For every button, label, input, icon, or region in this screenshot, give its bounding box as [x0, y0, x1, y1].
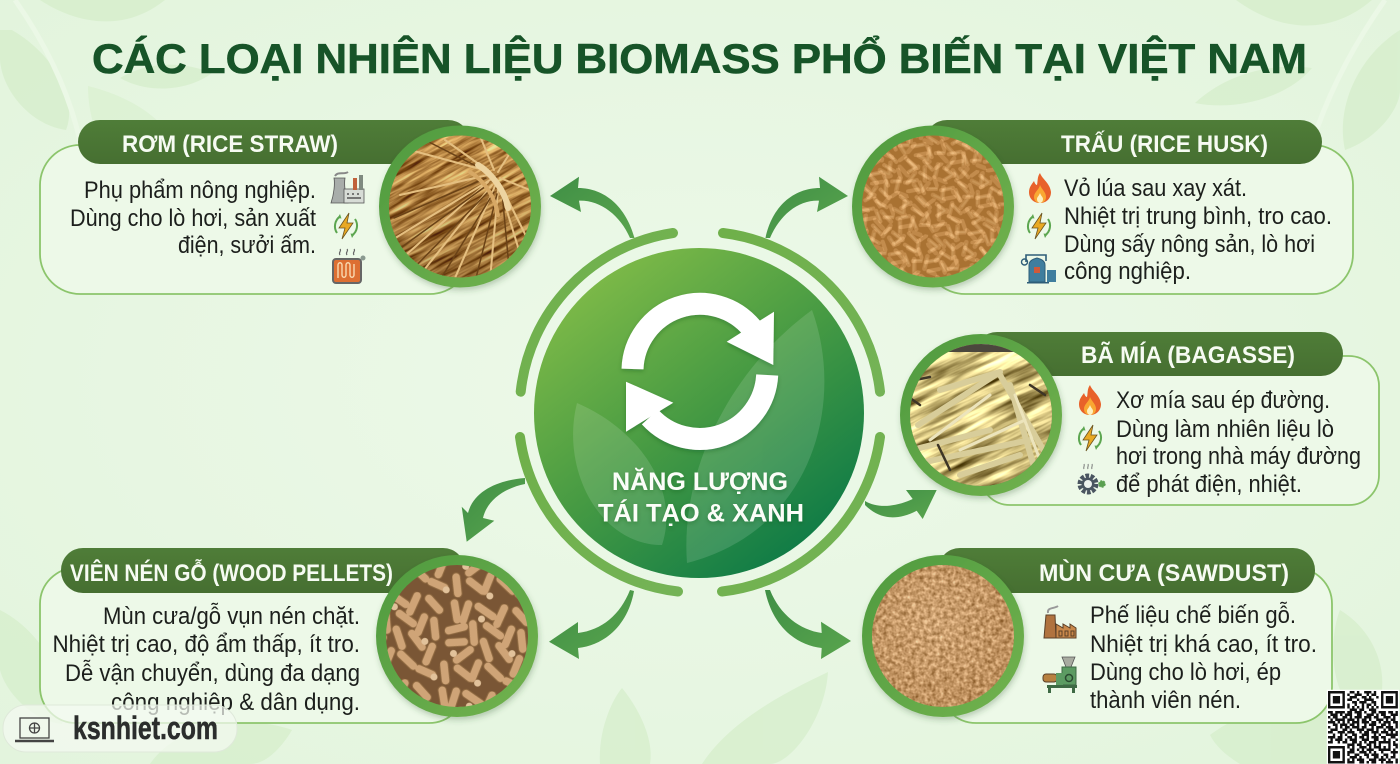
arrow: to bagasse — [865, 490, 937, 519]
heading: bagasse: BÃ MÍA (BAGASSE) — [1081, 341, 1295, 369]
icon: flame — [1029, 173, 1051, 203]
icon: laptop — [15, 718, 54, 741]
text: rice husk description: công nghiệp. — [1064, 258, 1191, 285]
center ring arcs — [520, 233, 880, 592]
hub label: NĂNG LƯỢNG — [612, 467, 788, 496]
text: bagasse description: hơi trong nhà máy đường — [1116, 443, 1361, 470]
icon: gears — [1080, 464, 1105, 492]
text: rice straw description — [70, 177, 316, 259]
arrow: to rice straw — [550, 177, 634, 238]
arrow: to wood pellets upper — [462, 478, 525, 542]
icon: heater — [333, 249, 366, 283]
panel box: wood pellets — [40, 568, 465, 723]
icon: flame — [1079, 385, 1101, 415]
text: wood pellets description — [52, 603, 360, 716]
icon: energy bolt — [335, 213, 357, 239]
photo: bagasse — [898, 334, 1066, 502]
text: wood pellets description: Nhiệt trị cao, độ ẩm thấp, ít tro. — [52, 631, 360, 658]
arrow: to sawdust — [765, 590, 851, 659]
heading: wood pellets — [61, 548, 465, 593]
heading: sawdust — [938, 548, 1315, 593]
heading: sawdust: MÙN CƯA (SAWDUST) — [1039, 559, 1289, 587]
heading: rice straw — [78, 120, 470, 164]
panel box: bagasse — [980, 356, 1379, 505]
photo: rice straw — [377, 126, 545, 294]
icon: brown factory — [1044, 606, 1076, 638]
text: sawdust description: Nhiệt trị khá cao, ít tro. — [1090, 631, 1317, 658]
text: wood pellets description: Dễ vận chuyển, dùng đa dạng — [65, 660, 360, 687]
icon: energy bolt — [1028, 213, 1050, 239]
text: wood pellets description: Mùn cưa/gỗ vụn nén chặt. — [103, 603, 360, 630]
icon: recycle arrows — [626, 304, 774, 439]
panel: rice straw — [39, 120, 545, 295]
icon: energy bolt — [1079, 425, 1101, 451]
icon: pellet machine — [1043, 657, 1077, 693]
text: wood pellets description: công nghiệp & dân dụng. — [111, 689, 360, 716]
text: rice husk description — [1064, 175, 1332, 285]
heading: bagasse — [975, 332, 1343, 376]
arrow: to rice husk — [766, 177, 848, 238]
center hub — [534, 248, 864, 578]
heading: rice straw: RƠM (RICE STRAW) — [122, 131, 338, 158]
text: sawdust description: Dùng cho lò hơi, ép — [1090, 659, 1281, 686]
panel: bagasse — [898, 332, 1380, 506]
title: CÁC LOẠI NHIÊN LIỆU BIOMASS PHỔ BIẾN TẠI VIỆT NAM — [92, 33, 1307, 82]
text: sawdust description: thành viên nén. — [1090, 687, 1241, 714]
text: bagasse description — [1116, 387, 1361, 498]
icon: boiler — [1022, 255, 1056, 284]
text: rice straw description: Dùng cho lò hơi, sản xuất — [70, 205, 316, 232]
hub circle — [534, 248, 864, 578]
heading: rice husk: TRẤU (RICE HUSK) — [1061, 130, 1268, 158]
text: rice husk description: Nhiệt trị trung bình, tro cao. — [1064, 203, 1332, 230]
panel box: rice straw — [40, 145, 470, 294]
panel box: sawdust — [940, 568, 1332, 723]
website badge — [3, 705, 237, 752]
text: rice straw description: điện, sưởi ấm. — [178, 232, 316, 259]
panel: sawdust — [862, 548, 1332, 723]
panel box: rice husk — [925, 145, 1353, 294]
hub label: TÁI TẠO & XANH — [598, 498, 804, 528]
text: sawdust description: Phế liệu chế biến gỗ. — [1090, 602, 1296, 629]
text: rice husk description: Vỏ lúa sau xay xát. — [1064, 175, 1247, 202]
text: bagasse description: Xơ mía sau ép đường. — [1116, 387, 1330, 414]
text: rice husk description: Dùng sấy nông sản, lò hơi — [1064, 231, 1315, 258]
text: sawdust description — [1090, 602, 1317, 714]
text: bagasse description: Dùng làm nhiên liệu lò — [1116, 416, 1334, 443]
QR code — [1327, 690, 1399, 764]
hub label — [598, 467, 804, 528]
website address: ksnhiet.com — [73, 710, 218, 746]
photo: sawdust — [862, 555, 1024, 717]
photo: rice husk — [852, 126, 1014, 288]
text: rice straw description: Phụ phẩm nông nghiệp. — [84, 177, 316, 204]
heading: wood pellets: VIÊN NÉN GỖ (WOOD PELLETS) — [70, 558, 393, 587]
icon: power plant — [331, 172, 364, 203]
panel: rice husk — [852, 120, 1353, 294]
text: bagasse description: để phát điện, nhiệt. — [1116, 471, 1302, 498]
arrow: to wood pellets lower — [549, 590, 634, 659]
heading: rice husk — [925, 120, 1322, 164]
hub leaves — [573, 310, 824, 563]
panel: wood pellets — [40, 548, 538, 723]
photo: wood pellets — [376, 555, 538, 717]
